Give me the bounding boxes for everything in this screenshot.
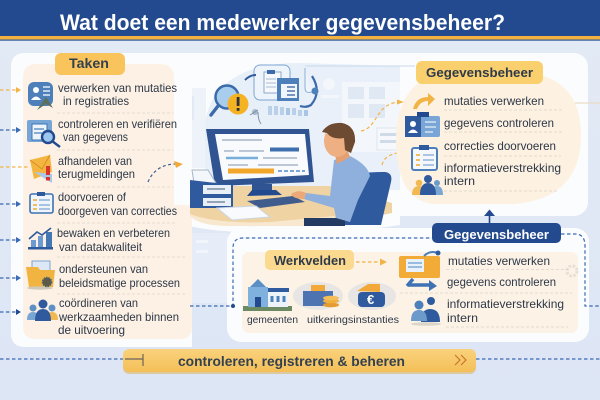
- illustration backdrop: [176, 63, 415, 303]
- icon: floating documents: [245, 65, 318, 124]
- keyboard: [247, 196, 305, 208]
- arrow: curved link to desk: [148, 161, 183, 182]
- task: terugmeldingen: [30, 154, 135, 183]
- task: beleidsmatige processen: ondersteunen van: [59, 262, 148, 276]
- task: controleren: [27, 117, 177, 147]
- banner: controleren, registreren & beheren: [0, 349, 600, 374]
- chair: [340, 172, 391, 225]
- arrows into Taken: [0, 87, 28, 315]
- icon: municipality building: [243, 279, 292, 311]
- arrows: illustration to Gegevensbeheer: [361, 100, 600, 165]
- title: Wat doet een medewerker gegevensbeheer?: [60, 10, 505, 35]
- panel: Taken: [11, 53, 192, 347]
- arrow: Werkvelden to list: [356, 258, 387, 266]
- panel: Werkvelden and Gegevensbeheer: gegevens controleren: [447, 275, 556, 289]
- task: correcties: [30, 190, 177, 218]
- paper tray: [190, 170, 233, 208]
- panel: Werkvelden and Gegevensbeheer: informatieverstrekking: [447, 297, 564, 311]
- task: datakwaliteit: [28, 226, 170, 254]
- desk: [190, 186, 392, 226]
- person: [291, 123, 370, 226]
- icon: id card: [405, 112, 440, 137]
- task: coördineren: coördineren van: [59, 296, 138, 310]
- icon: folder and arrows: [399, 250, 440, 291]
- icon: two people: [411, 297, 441, 326]
- heading: Gegevensbeheer: Gegevensbeheer: [426, 65, 533, 80]
- heading: Gegevensbeheer: [416, 61, 543, 84]
- icon: team: [412, 175, 443, 195]
- task: mutaties: in registraties: [63, 94, 129, 108]
- task: coördineren: [27, 296, 179, 337]
- task: correcties: doorvoeren of: [58, 190, 127, 204]
- banner: controleren, registreren & beheren: controleren, registreren & beheren: [178, 354, 405, 369]
- panel: Gegevensbeheer top: gegevens controleren: [444, 116, 554, 130]
- icon: benefits office with coins: [293, 282, 343, 310]
- icon: clipboard: [412, 145, 437, 170]
- panel: Gegevensbeheer top: correcties doorvoeren: [444, 139, 556, 153]
- task: terugmeldingen: afhandelen van: [58, 154, 132, 168]
- panel: Gegevensbeheer top: informatieverstrekking: [444, 161, 561, 175]
- panel: Werkvelden and Gegevensbeheer: intern: [447, 311, 478, 325]
- panel: Werkvelden and Gegevensbeheer: [190, 223, 600, 342]
- heading: Taken: [55, 53, 125, 75]
- task: terugmeldingen: terugmeldingen: [58, 167, 135, 181]
- icon: euro wallet: [348, 282, 396, 310]
- monitor: [206, 129, 314, 196]
- heading: Gegevensbeheer dark: [432, 223, 561, 243]
- panel: Werkvelden and Gegevensbeheer: mutaties verwerken: [448, 254, 550, 268]
- panel: Werkvelden and Gegevensbeheer: uitkeringsinstanties: [307, 314, 399, 326]
- icon: arrow: [413, 93, 435, 109]
- heading: Taken: Taken: [69, 55, 109, 71]
- task: datakwaliteit: van datakwaliteit: [59, 240, 143, 254]
- task: controleren: van gegevens: [63, 130, 128, 144]
- loose paper: [217, 206, 270, 220]
- panel: Gegevensbeheer top: [396, 61, 581, 204]
- task: correcties: doorgeven van correcties: [58, 204, 177, 218]
- faint gear: [567, 266, 577, 276]
- task: mutaties: [28, 81, 177, 110]
- task: coördineren: werkzaamheden binnen: [58, 310, 179, 324]
- heading: Werkvelden: Werkvelden: [274, 253, 346, 268]
- task: controleren: controleren en verifiëren: [58, 117, 177, 131]
- task: beleidsmatige processen: [26, 261, 180, 290]
- panel: Gegevensbeheer top: mutaties verwerken: [444, 94, 544, 108]
- heading: Werkvelden: [265, 250, 354, 270]
- panel: top white backdrop: [11, 53, 588, 216]
- heading: Gegevensbeheer dark: Gegevensbeheer: [444, 227, 549, 242]
- task: mutaties: verwerken van mutaties: [58, 81, 177, 95]
- illustration: employee at desk: [190, 65, 392, 226]
- dotted connector: [190, 234, 600, 306]
- panel: Gegevensbeheer top: intern: [444, 174, 475, 188]
- arrow: up to Gegevensbeheer: [484, 210, 495, 224]
- task: beleidsmatige processen: beleidsmatige processen: [59, 276, 180, 290]
- panel: Werkvelden and Gegevensbeheer: gemeenten: [247, 314, 298, 326]
- icon: euro wallet: €: [367, 292, 374, 307]
- icon: magnifier with alert: [211, 86, 248, 115]
- task: datakwaliteit: bewaken en verbeteren: [57, 226, 170, 240]
- header banner: [0, 0, 600, 41]
- task: coördineren: de uitvoering: [58, 323, 125, 337]
